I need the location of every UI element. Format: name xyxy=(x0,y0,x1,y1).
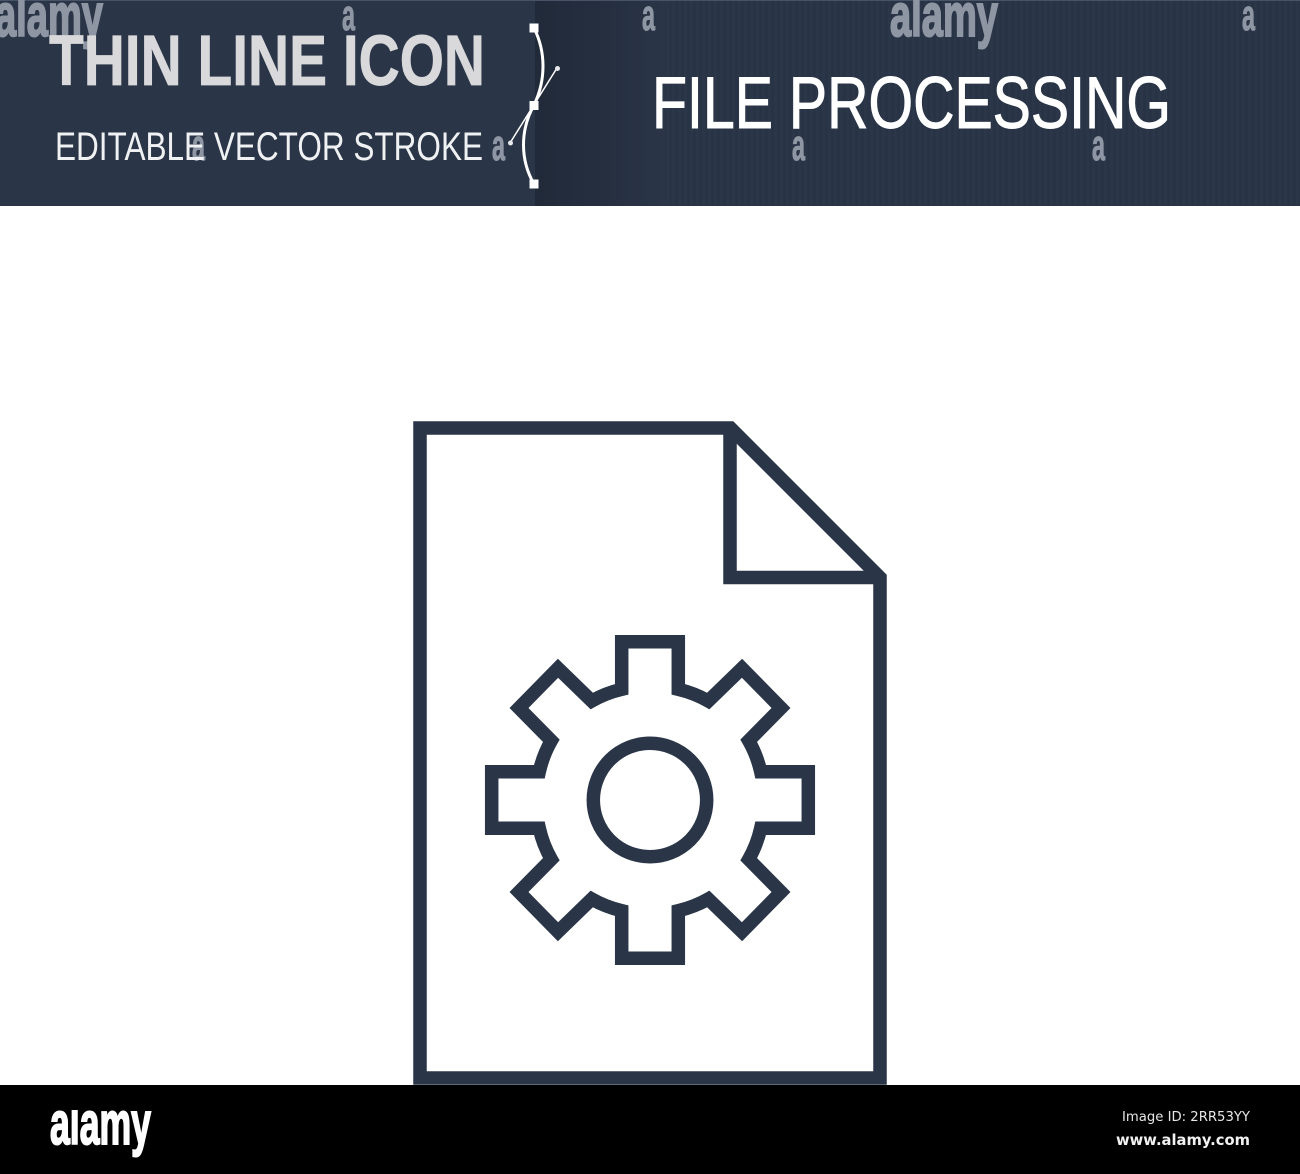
watermarks in header: a xyxy=(492,121,505,170)
document outline xyxy=(420,428,880,1078)
heading: thin line icon: THIN LINE ICON xyxy=(49,22,485,101)
icon: file processing document with gear xyxy=(420,428,880,1078)
image id: Image ID: 2RR53YY xyxy=(1122,1109,1251,1125)
watermarks in header: a xyxy=(1092,121,1105,170)
website url: www.alamy.com xyxy=(1116,1131,1250,1149)
subheading: editable vector stroke: EDITABLE VECTOR STROKE xyxy=(55,125,483,169)
watermarks in header xyxy=(0,0,1255,170)
gear centre ring xyxy=(593,743,707,857)
folded corner xyxy=(730,428,880,578)
footer bar xyxy=(0,1085,1300,1174)
heading: file processing: FILE PROCESSING xyxy=(652,63,1171,144)
icon: bezier curve handles xyxy=(508,24,560,188)
footer logo: alamy: alamy xyxy=(50,1090,151,1157)
watermarks in header: a xyxy=(792,121,805,170)
header banner xyxy=(0,0,1300,206)
watermarks in header: a xyxy=(192,121,205,170)
gear outline xyxy=(492,642,808,958)
